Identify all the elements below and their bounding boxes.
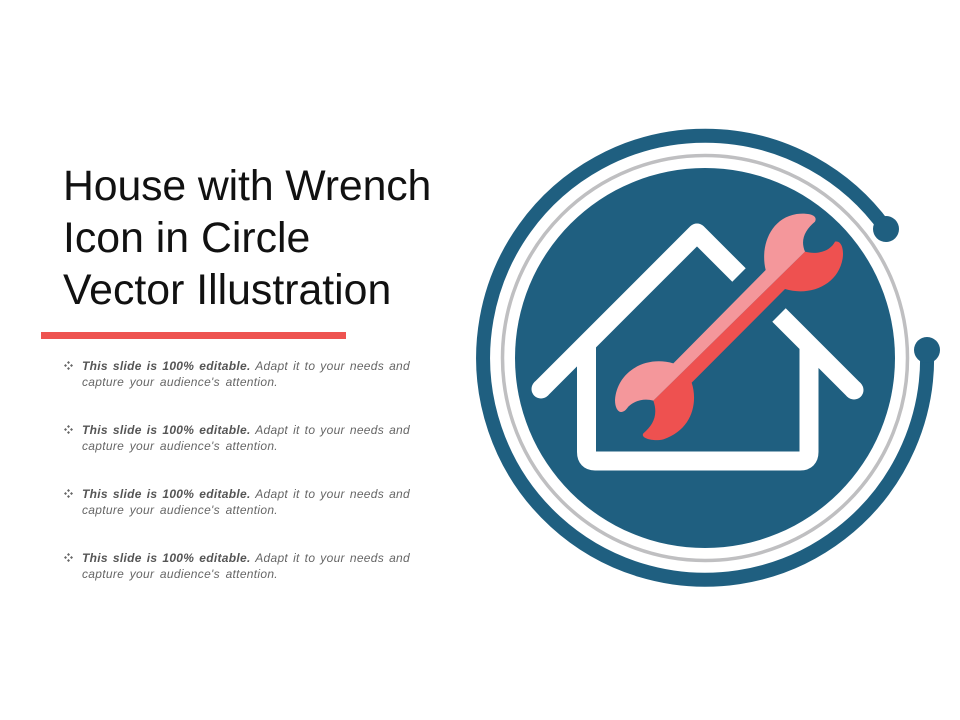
gray ring [502, 156, 908, 560]
bullet 2: This slide is 100% editable. Adapt it to your needs and [82, 423, 410, 437]
bullet 4: This slide is 100% editable. Adapt it to your needs and [82, 551, 410, 565]
bullet 3: capture your audience's attention. [82, 503, 278, 517]
bullet 4: capture your audience's attention. [82, 567, 278, 581]
red divider bar [41, 332, 346, 339]
bullet 2: capture your audience's attention. [82, 439, 278, 453]
dark blue disc [515, 168, 895, 548]
icon: house [532, 233, 864, 461]
icon: outer arc with end dots [483, 136, 940, 580]
bullet 2 [64, 423, 410, 453]
bullet 3 [64, 487, 410, 517]
title: Vector Illustration [63, 266, 391, 314]
bullet 3: This slide is 100% editable. Adapt it to your needs and [82, 487, 410, 501]
title: House with Wrench [63, 162, 431, 210]
bullet 1 [64, 359, 410, 389]
bullet 1: This slide is 100% editable. Adapt it to your needs and [82, 359, 410, 373]
bullet 4 [64, 551, 410, 581]
icon: wrench [615, 214, 843, 440]
title: Icon in Circle [63, 214, 310, 262]
bullet 1: capture your audience's attention. [82, 375, 278, 389]
title [63, 162, 431, 314]
